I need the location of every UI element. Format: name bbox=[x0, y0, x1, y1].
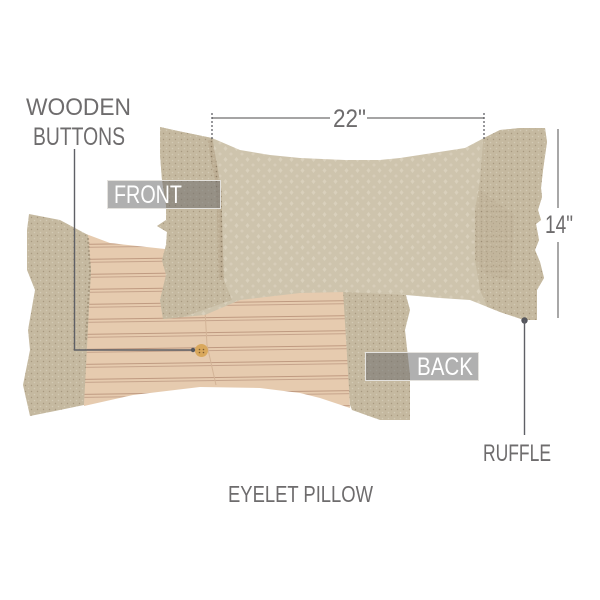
label: wooden buttons: BUTTONS bbox=[33, 123, 125, 151]
dimension: height 14 inches: 14" bbox=[545, 211, 573, 239]
back pillow centre seam bbox=[205, 310, 216, 385]
back pillow left ruffle bbox=[23, 214, 91, 416]
label: front: FRONT bbox=[114, 181, 182, 209]
label: back: BACK bbox=[417, 353, 473, 381]
front pillow left ruffle seam bbox=[210, 140, 221, 280]
label: wooden buttons bbox=[26, 94, 131, 151]
callout: ruffle: RUFFLE bbox=[483, 440, 551, 467]
front pillow right ruffle darker fold bbox=[476, 190, 515, 280]
back pillow right ruffle bbox=[343, 290, 410, 420]
title: eyelet pillow: EYELET PILLOW bbox=[228, 481, 373, 507]
dimension: width 22 inches bbox=[212, 105, 484, 141]
back pillow left ruffle seam bbox=[86, 238, 90, 340]
leader dot: wooden button bbox=[191, 348, 195, 352]
panel: back of pillow bbox=[23, 214, 410, 420]
leader line: wooden buttons bbox=[74, 149, 192, 350]
dimension: width 22 inches: 22" bbox=[333, 105, 366, 133]
callout: ruffle bbox=[483, 317, 551, 467]
icon: wooden button bbox=[195, 344, 208, 357]
front pillow body bbox=[157, 127, 547, 320]
label: back bbox=[366, 352, 478, 381]
panel: front of pillow bbox=[157, 127, 547, 320]
front pillow left ruffle bbox=[157, 127, 232, 319]
label: wooden buttons: WOODEN bbox=[26, 94, 131, 121]
front pillow right ruffle bbox=[475, 128, 547, 320]
back pillow body bbox=[84, 234, 350, 408]
